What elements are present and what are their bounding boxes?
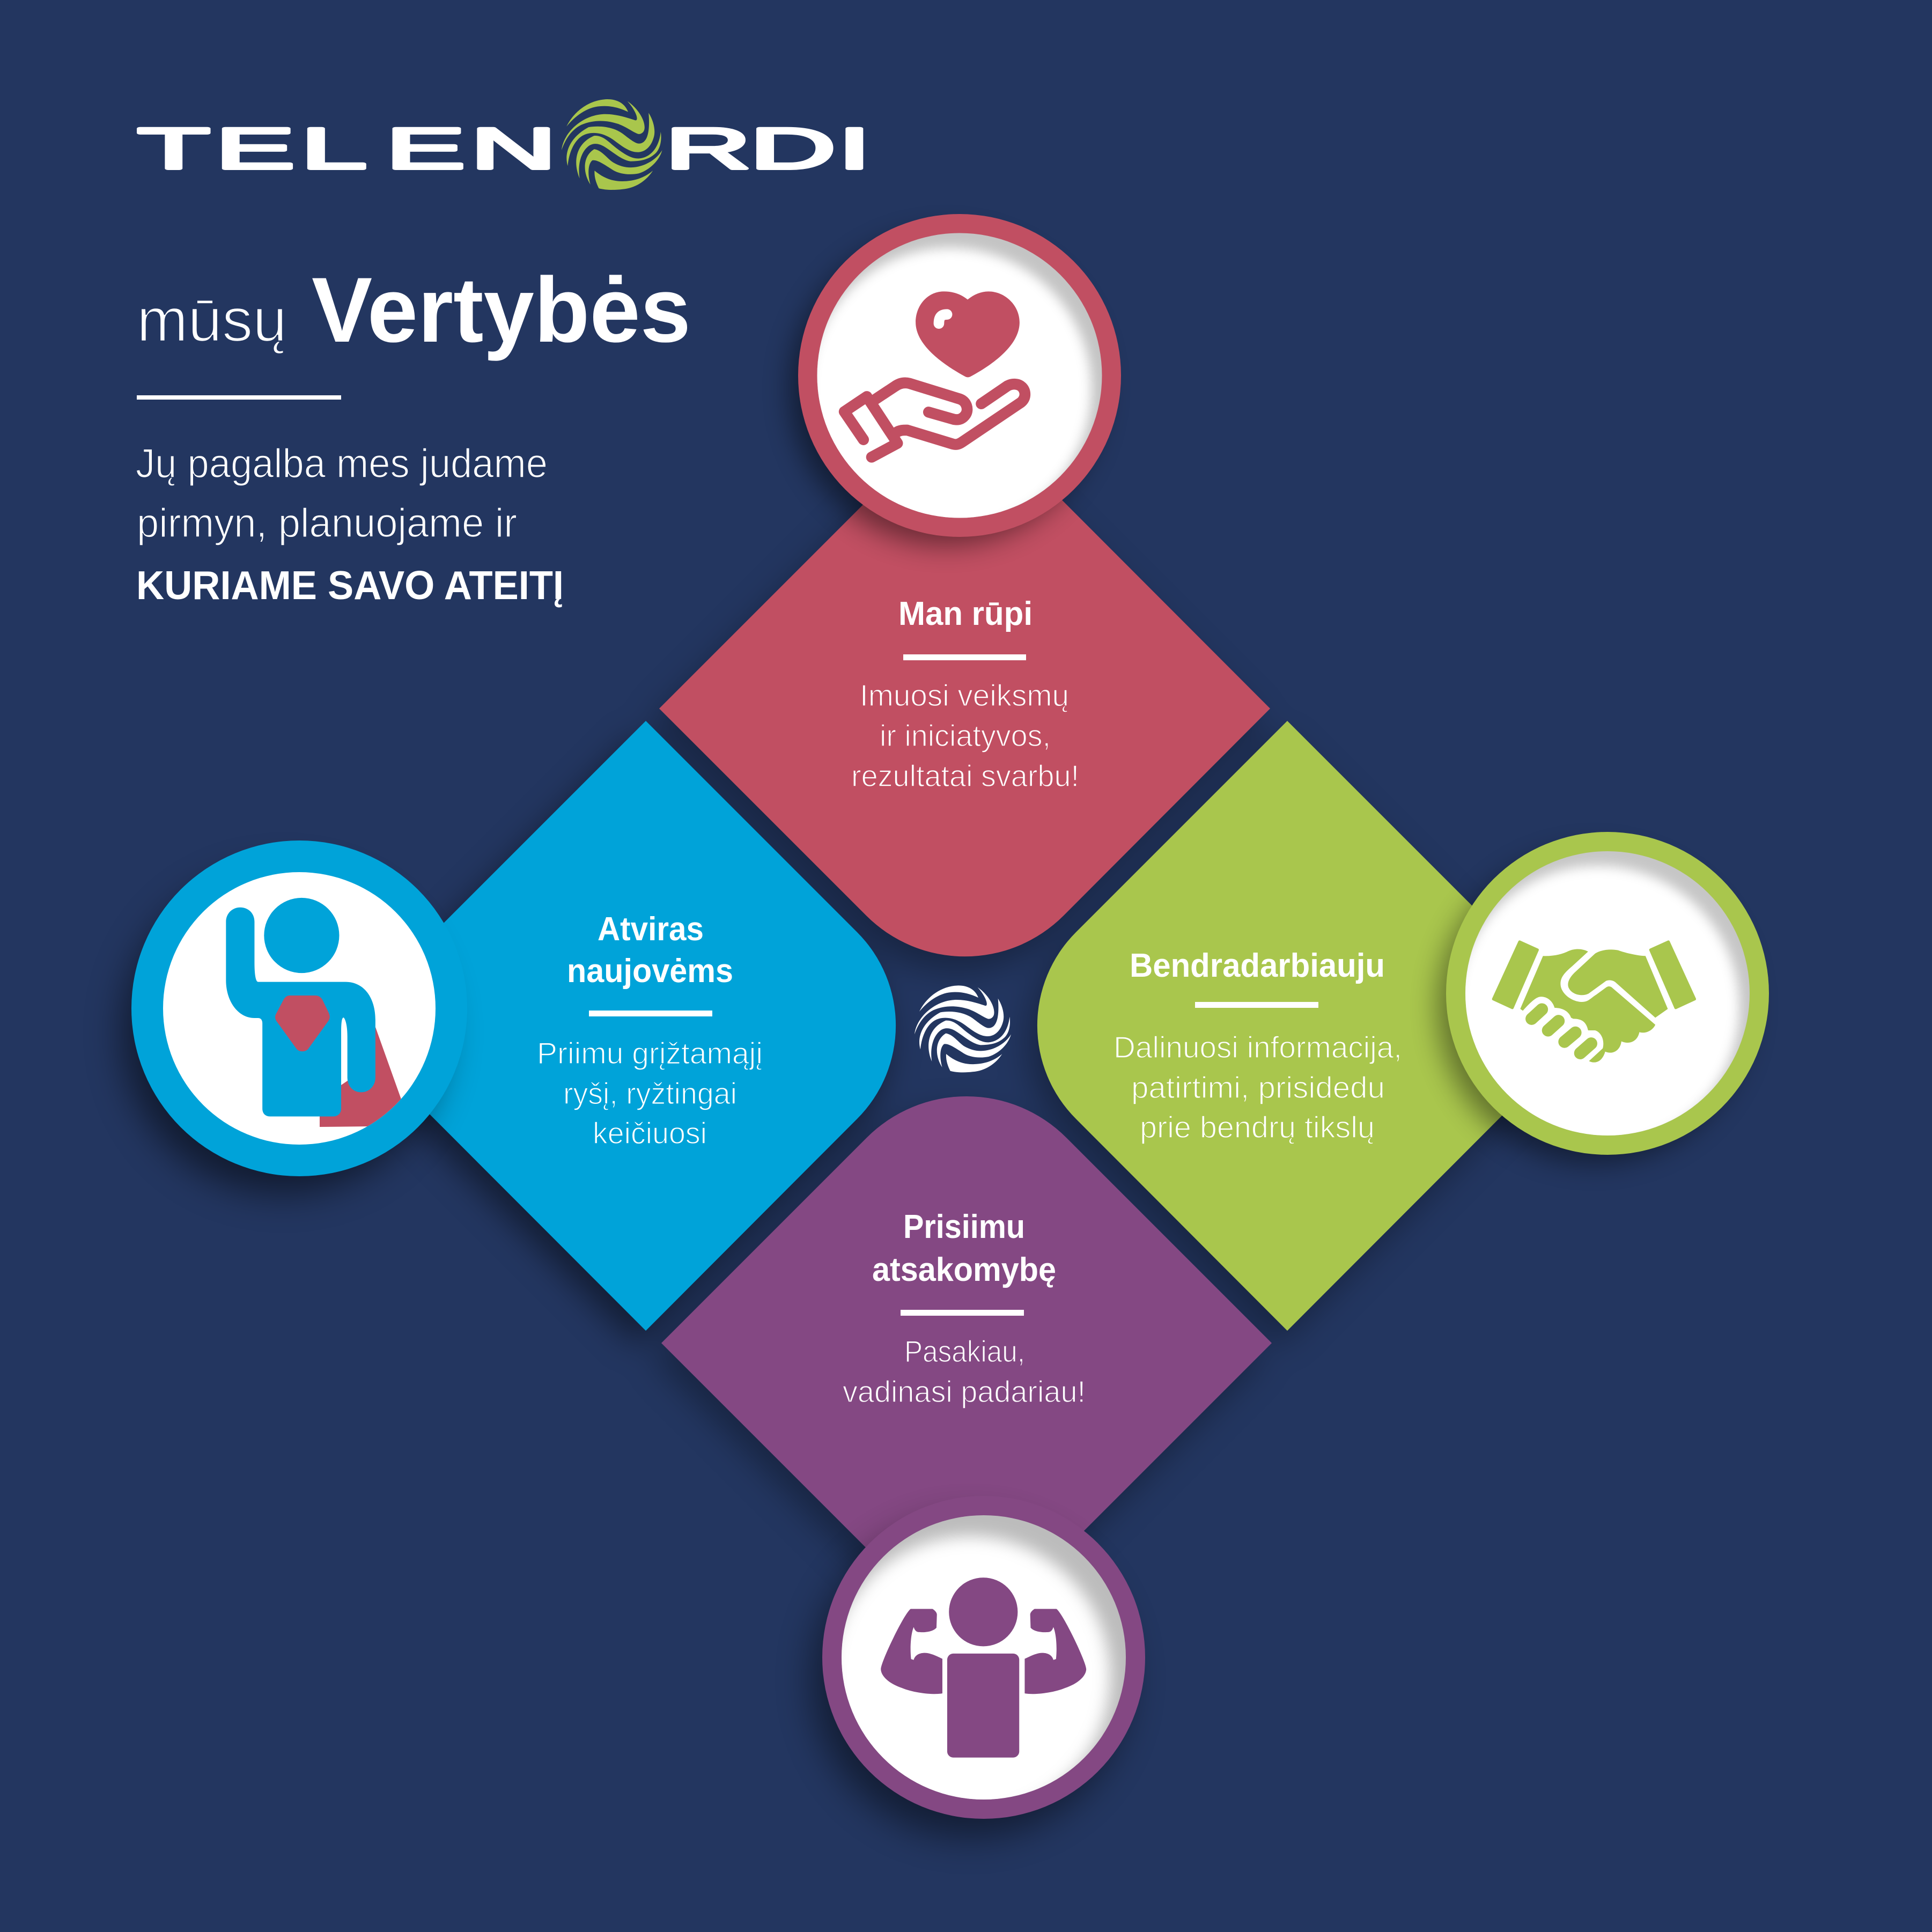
logo: Telenordi: TELEN — [137, 116, 556, 181]
intro text: Jų pagalba mes judame — [136, 441, 548, 486]
diamond shadows — [333, 418, 1583, 1663]
title: mūsų Vertybės — [137, 259, 691, 362]
logo: Telenordi — [137, 99, 871, 190]
panel: Prisiimu atsakomybę — [661, 1096, 1272, 1648]
icon badge: strong person — [812, 1496, 1145, 1837]
panel: Man rūpi: Man rūpi — [898, 595, 1033, 632]
title underline — [137, 395, 341, 400]
panel: Bendradarbiauju: prie bendrų tikslų — [1140, 1110, 1375, 1145]
icon badge: handshake — [1437, 832, 1769, 1163]
panel: Atviras naujovėms — [341, 721, 896, 1331]
panel: Prisiimu atsakomybę: atsakomybę — [872, 1251, 1056, 1288]
panel: Atviras naujovėms: naujovėms — [567, 953, 733, 990]
panel: Atviras naujovėms: Priimu grįžtamąjį — [537, 1036, 763, 1071]
panel: Bendradarbiauju: Bendradarbiauju — [1130, 947, 1385, 984]
panel: Man rūpi — [659, 403, 1270, 956]
icon badge: superhero — [122, 840, 467, 1193]
intro text: pirmyn, planuojame ir — [137, 500, 517, 546]
panel: Atviras naujovėms: Atviras — [598, 911, 704, 948]
panel: Man rūpi: ir iniciatyvos, — [880, 719, 1051, 753]
panel: Prisiimu atsakomybę: Prisiimu — [903, 1208, 1025, 1245]
title: mūsų Vertybės: Vertybės — [312, 259, 691, 362]
panel: Bendradarbiauju — [1037, 721, 1592, 1331]
panel: Bendradarbiauju: patirtimi, prisidedu — [1131, 1071, 1385, 1105]
panel: Atviras naujovėms: ryšį, ryžtingai — [563, 1076, 737, 1111]
intro text: KURIAME SAVO ATEITĮ — [136, 563, 564, 608]
intro text — [136, 441, 564, 608]
panel: Man rūpi: rezultatai svarbu! — [851, 759, 1079, 793]
center swirl emblem — [915, 985, 1011, 1072]
panel: Prisiimu atsakomybę: Pasakiau, — [904, 1334, 1025, 1369]
panel: Prisiimu atsakomybę: vadinasi padariau! — [843, 1375, 1086, 1409]
logo: Telenordi: RDI — [665, 116, 871, 181]
panel: Bendradarbiauju: Dalinuosi informacija, — [1114, 1030, 1402, 1065]
panel: Atviras naujovėms: keičiuosi — [593, 1116, 707, 1151]
title: mūsų Vertybės: mūsų — [137, 286, 287, 355]
icon badge: caring hand with heart — [790, 214, 1121, 545]
panel: Man rūpi: Imuosi veiksmų — [860, 679, 1069, 713]
